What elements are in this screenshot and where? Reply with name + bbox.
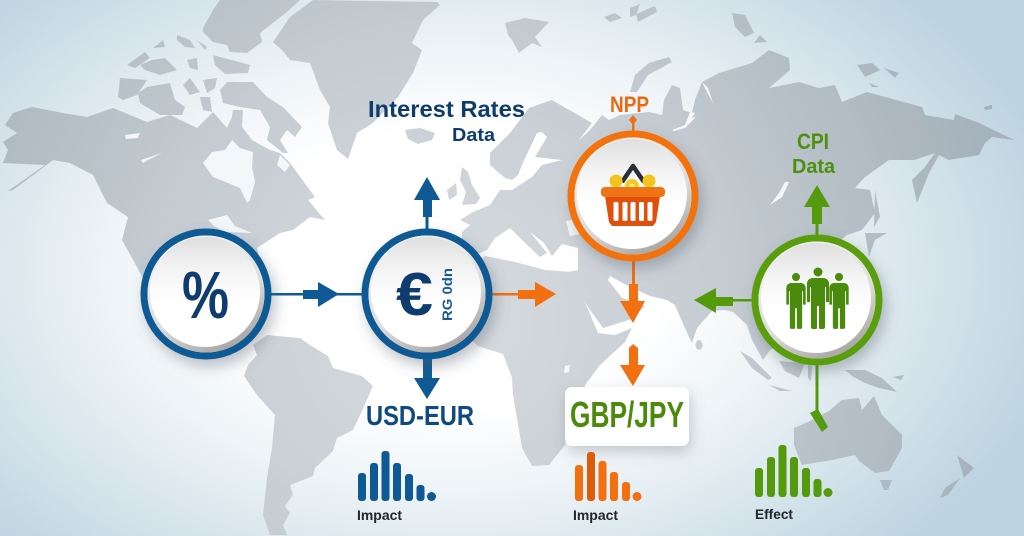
Arctic islands [118,0,302,153]
Africa [460,256,632,466]
panel: percent circle [144,232,268,356]
Eurasia [460,50,1014,360]
arrow: euro to right [490,282,556,307]
label: CPI Data [792,129,836,178]
bar chart: green effect [755,445,832,497]
label: Interest Rates Data: Data [452,125,496,145]
rotated label in euro circle: RG 0dn [440,268,455,321]
icon: euro sign: € [396,261,433,328]
arrow: down to GBP/JPY [620,344,645,386]
arrow: euro down to USD-EUR [414,356,440,399]
arrow: people up to CPI [804,185,830,236]
arrow: basket up to NPP [629,115,637,134]
arrow: people left [694,288,754,313]
panel: people circle [755,238,879,362]
inland water [566,82,789,236]
arrows: orange [490,115,645,386]
panel: euro circle [365,232,489,356]
icon: percent sign: % [182,258,229,333]
arrow: basket down [620,258,645,323]
arrows: green [694,185,830,432]
bar chart: blue impact [358,451,436,501]
Arctic Eurasia islands [505,4,992,257]
label: USD-EUR: USD-EUR [366,400,474,431]
arrow: percent to euro [270,282,364,307]
Australia and New Zealand [794,396,974,498]
label: Impact orange: Impact [573,507,618,523]
label: Interest Rates Data: Interest Rates [368,96,525,122]
Madagascar gap [564,365,570,373]
connector lines and arrows: blue [270,177,440,399]
Hudson Bay and lakes [125,133,290,233]
arrow: euro up to interest rates [414,177,440,232]
panel: basket circle [571,134,695,258]
Iceland, Britain and Ireland [405,128,480,205]
label: CPI Data: CPI [797,129,829,154]
label: Impact blue: Impact [357,507,402,523]
icon: shopping basket [601,166,665,226]
label: Interest Rates Data [368,96,525,145]
label: Effect: Effect [755,506,793,522]
panel: GBP/JPY label box [565,387,689,446]
bar chart: orange impact [575,452,642,501]
label: CPI Data: Data [792,156,836,178]
Greenland [273,0,440,159]
label: GBP/JPY: GBP/JPY [570,394,684,435]
North America [3,107,325,335]
icon: three people [786,268,849,329]
arrow: people down [810,362,828,432]
Southeast Asia [696,340,904,392]
label: NPP: NPP [610,92,649,117]
South America [244,335,373,535]
